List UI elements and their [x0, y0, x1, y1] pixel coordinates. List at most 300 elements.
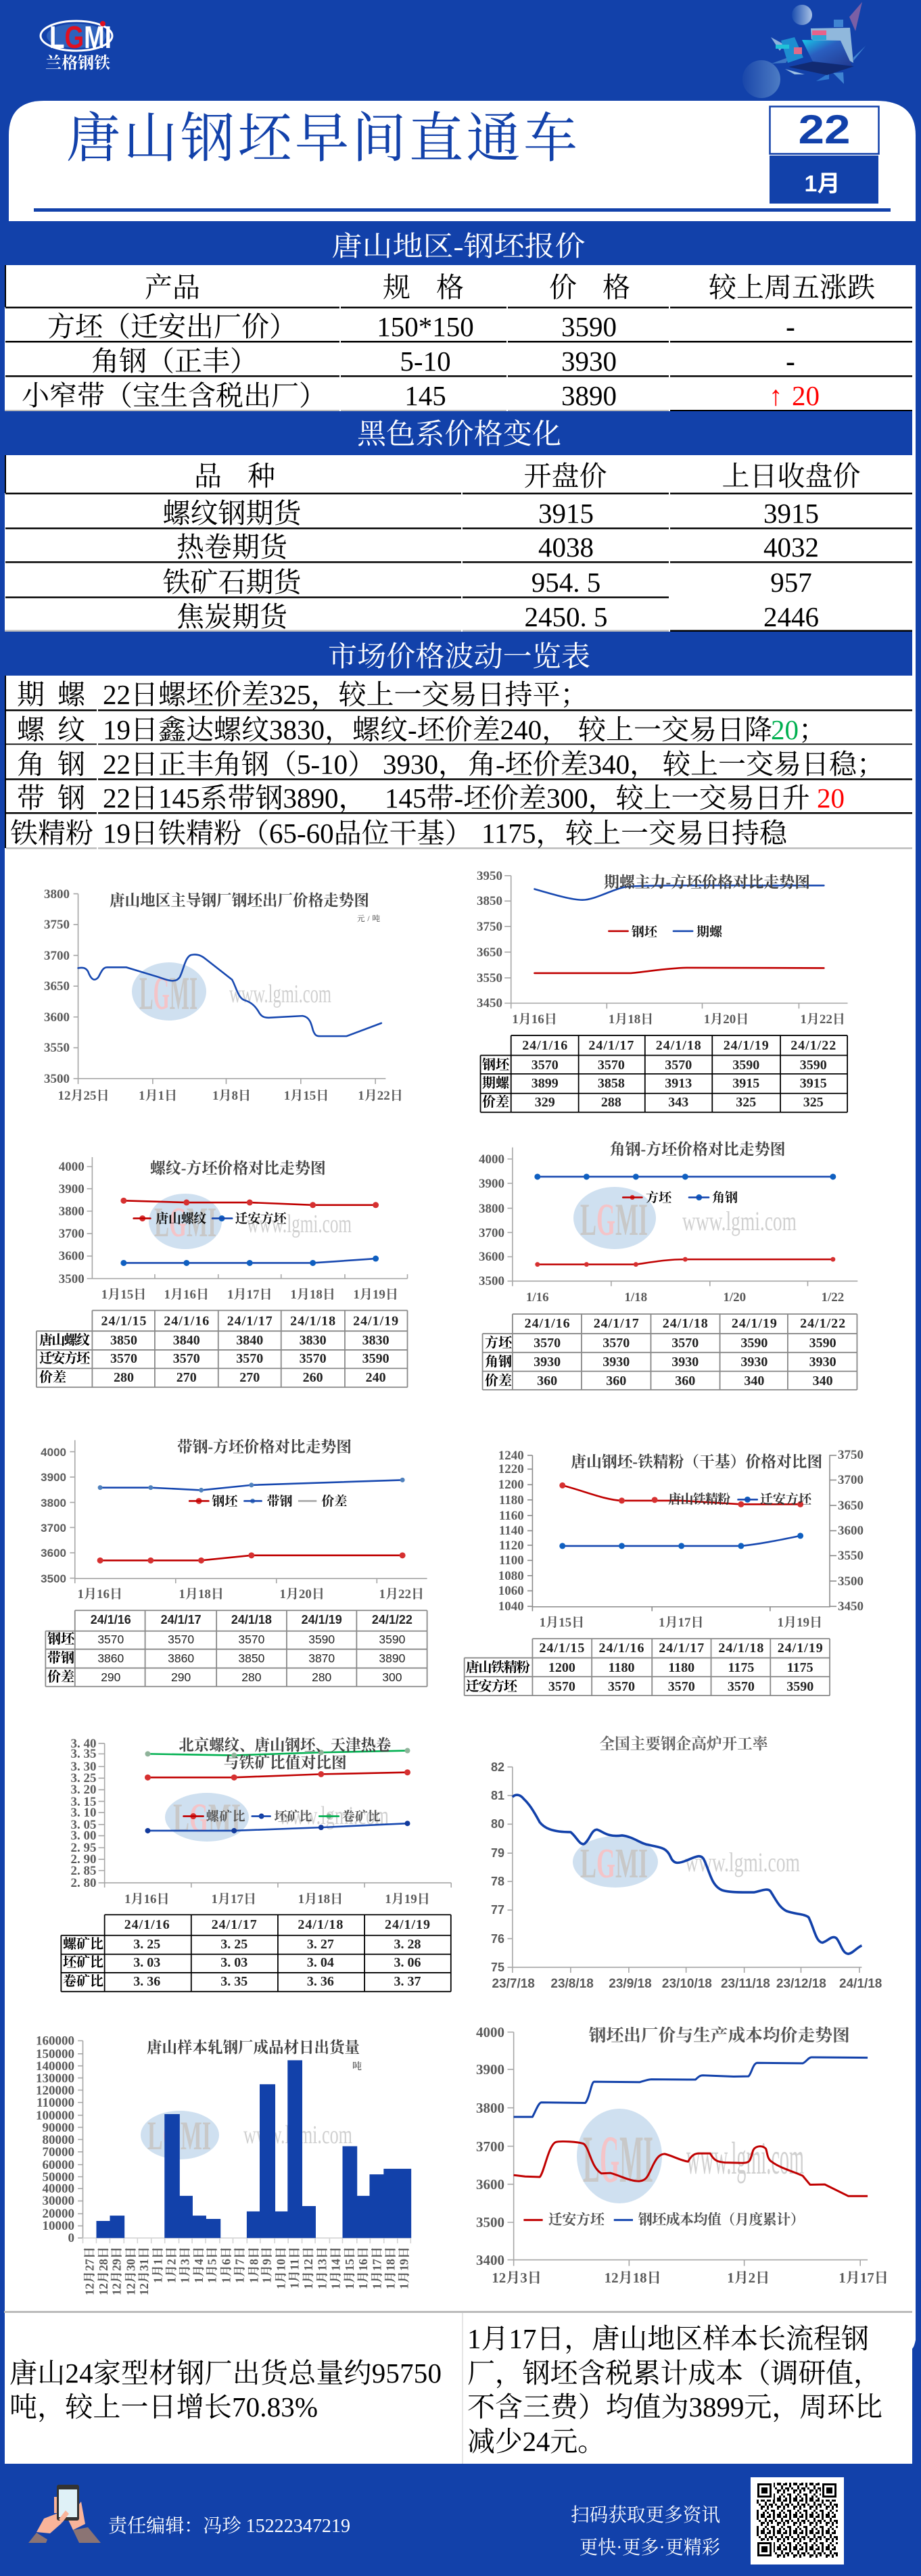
icon: LGMI logo: LGMI — [49, 20, 112, 55]
legend: 迁安方坯 — [760, 1492, 813, 1507]
left y axis labels: 1200 — [498, 1478, 524, 1492]
row: rebar — [17, 714, 826, 745]
panel: market fluctuation heading: 市场价格波动一览表 — [328, 641, 590, 673]
chart: Tangshan mill billet price trend — [44, 887, 403, 1103]
data table: 3840 — [236, 1333, 263, 1348]
row: coke futures: 2450. 5 — [525, 601, 607, 632]
panel: ferrous prices heading — [0, 411, 912, 455]
x axis labels: 1月20日 — [279, 1587, 325, 1601]
row: square billet: - — [786, 311, 795, 342]
data table: 3. 37 — [394, 1974, 421, 1989]
data table: 3570 — [671, 1336, 699, 1351]
row: iron concentrate — [10, 818, 788, 849]
y axis labels: 3700 — [476, 2138, 504, 2155]
data table: 3930 — [603, 1355, 630, 1369]
data table: 3590 — [362, 1351, 389, 1366]
x axis labels: 1/16 — [526, 1290, 549, 1305]
x axis labels: 1月5日 — [206, 2247, 219, 2283]
row: strip steel: 20 — [817, 782, 845, 814]
y axis labels: 3650 — [44, 979, 70, 993]
y axis labels: 3650 — [477, 945, 502, 960]
x axis labels: 24/1/18 — [839, 1977, 882, 1991]
x axis labels: 1月20日 — [704, 1012, 749, 1027]
x axis labels: 1月18日 — [384, 2247, 398, 2289]
chart title: 唐山地区主导钢厂钢坯出厂价格走势图 — [110, 891, 369, 909]
panel: market fluctuation heading — [0, 632, 912, 676]
row: hot coil futures: 热卷期货 — [176, 532, 289, 563]
x axis labels: 1/18 — [624, 1290, 647, 1305]
y axis labels: 40000 — [42, 2182, 74, 2196]
y axis labels: 2. 85 — [70, 1864, 96, 1878]
chart: iron ore ratios — [61, 1736, 451, 1992]
y axis labels: 3600 — [59, 1249, 85, 1263]
row: angle steel — [91, 346, 795, 377]
x axis labels: 1月16日 — [512, 1012, 557, 1027]
watermark — [577, 2109, 804, 2203]
row: rebar futures: 3915 — [763, 498, 819, 529]
footer — [0, 2464, 921, 2576]
data table: 3930 — [534, 1355, 561, 1369]
data table: 3915 — [732, 1076, 759, 1091]
row: rebar futures: 3915 — [538, 498, 594, 529]
row: iron ore futures: 954. 5 — [532, 567, 600, 598]
x axis labels: 23/8/18 — [550, 1977, 594, 1991]
watermark: LGMI — [173, 1796, 241, 1840]
x axis labels: 1月8日 — [247, 2247, 260, 2283]
row: strip steel: 带钢 — [17, 782, 85, 814]
panel: shipment note and cost note — [4, 2311, 912, 2464]
data table: 24/1/18 — [656, 1038, 701, 1053]
right y axis labels: 3700 — [838, 1473, 864, 1487]
y axis labels: 30000 — [42, 2194, 74, 2208]
text block: cost note: 不含三费）均值为3899元，周环比 — [467, 2391, 882, 2422]
data table: 3570 — [236, 1351, 263, 1366]
y axis labels: 20000 — [42, 2207, 74, 2221]
data table: 方坯 — [485, 1335, 513, 1351]
chart: daily shipments bar chart — [36, 2034, 411, 2295]
y axis labels: 10000 — [42, 2219, 74, 2233]
data table: 3899 — [532, 1076, 559, 1091]
text block: shipment note: 吨，较上一日增长70.83% — [9, 2391, 318, 2422]
table header: 上日收盘价 — [722, 461, 860, 492]
text block: scan prompt — [571, 2504, 720, 2558]
x axis labels: 23/12/18 — [776, 1977, 826, 1991]
watermark: LGMI — [580, 1194, 648, 1245]
legend: 唐山铁精粉 — [668, 1491, 730, 1507]
chart: blast furnace operating rate — [491, 1735, 882, 1991]
date box: month: 1月 — [805, 171, 840, 197]
data table: 329 — [535, 1095, 555, 1110]
x axis labels: 1月16日 — [356, 2247, 370, 2289]
data table: 24/1/22 — [372, 1613, 412, 1626]
data table: 24/1/19 — [724, 1038, 769, 1053]
row: angle steel: 22日正丰角钢（5-10） — [103, 749, 375, 780]
x axis labels: 1月1日 — [151, 2247, 164, 2283]
data table: 3590 — [740, 1336, 768, 1351]
data table: 3913 — [665, 1076, 692, 1091]
x axis labels — [124, 1892, 430, 1906]
data table: 325 — [803, 1095, 824, 1110]
data table: 24/1/16 — [164, 1313, 209, 1328]
data table: 3. 25 — [133, 1937, 160, 1952]
watermark — [149, 1194, 352, 1249]
row: angle steel: 3930 — [561, 346, 617, 377]
data table: 360 — [537, 1374, 557, 1388]
chart: angle steel vs billet — [479, 1141, 857, 1390]
data table: 角钢 — [485, 1354, 512, 1369]
y axis labels — [41, 1446, 66, 1585]
data table: 24/1/17 — [588, 1038, 634, 1053]
x axis labels: 1月15日 — [540, 1615, 584, 1630]
row: angle steel: 5-10 — [400, 346, 451, 377]
data table: 3870 — [308, 1652, 335, 1665]
y axis labels: 4000 — [479, 1152, 504, 1167]
chart title: 带钢-方坯价格对比走势图 — [176, 1438, 352, 1455]
y axis labels: 3900 — [59, 1182, 85, 1196]
y axis labels: 82 — [491, 1760, 504, 1774]
data table: 24/1/19 — [302, 1613, 342, 1626]
title panel — [9, 101, 916, 221]
legend: 方坯 — [646, 1190, 673, 1205]
x axis labels: 1月16日 — [124, 1892, 169, 1906]
row: futures rebar: 期螺 — [17, 679, 86, 710]
y axis labels: 100000 — [36, 2109, 74, 2123]
icon: LGMI logo: 兰格钢铁 — [45, 54, 110, 72]
data table: 300 — [382, 1670, 402, 1684]
data table: 1180 — [609, 1660, 634, 1675]
legend — [646, 1190, 738, 1205]
row: iron concentrate: 铁精粉 — [10, 818, 93, 849]
row: rebar futures: 螺纹钢期货 — [162, 498, 303, 529]
row: hot coil futures: 4038 — [538, 532, 594, 563]
y axis labels: 130000 — [36, 2071, 74, 2086]
x axis labels: 1月8日 — [212, 1088, 251, 1103]
data table: 340 — [744, 1374, 764, 1388]
data table: 3850 — [238, 1652, 265, 1665]
y axis labels: 80000 — [42, 2133, 74, 2147]
unit: 元/吨 — [357, 914, 380, 923]
left y axis labels: 1140 — [499, 1524, 524, 1538]
x axis labels: 12月27日 — [82, 2247, 96, 2295]
right y axis labels: 3600 — [838, 1524, 864, 1538]
y axis labels: 3450 — [477, 996, 502, 1010]
x axis labels: 23/11/18 — [721, 1977, 770, 1991]
watermark: LGMI — [154, 1200, 216, 1246]
watermark: LGMI — [147, 2113, 211, 2158]
legend: 唐山螺纹 — [156, 1211, 206, 1226]
x axis labels: 12月3日 — [492, 2270, 542, 2286]
y axis labels: 4000 — [59, 1160, 85, 1174]
legend — [548, 2211, 805, 2228]
y axis labels: 3. 25 — [70, 1771, 96, 1785]
data table: 24/1/17 — [212, 1917, 257, 1932]
table header: 较上周五涨跌 — [709, 272, 875, 303]
data table — [39, 1313, 398, 1385]
x axis labels — [492, 2270, 889, 2286]
x axis labels: 1月17日 — [227, 1287, 272, 1302]
data table: 1180 — [668, 1660, 694, 1675]
y axis labels: 3800 — [479, 1202, 504, 1216]
x axis labels: 1月17日 — [839, 2270, 889, 2286]
y axis labels: 3400 — [476, 2252, 504, 2268]
row: iron concentrate: 1175， — [481, 818, 563, 849]
row: narrow strip: ↑ — [769, 380, 783, 411]
chart: futures rebar vs billet — [477, 869, 848, 1113]
row: futures rebar: 22日螺坯价差325，较上一交易日持平； — [103, 679, 588, 710]
x axis labels: 1/22 — [822, 1290, 844, 1305]
watermark — [573, 1187, 797, 1249]
data table: 唐山铁精粉 — [466, 1659, 530, 1675]
watermark: www.lgmi.com — [243, 2121, 352, 2149]
data table: 迁安方坯 — [466, 1679, 519, 1694]
y axis labels — [70, 1737, 96, 1890]
data table: 270 — [239, 1370, 260, 1385]
chart title: 北京螺纹、唐山钢坯、天津热卷 — [179, 1736, 391, 1754]
chart title: 螺纹-方坯价格对比走势图 — [150, 1160, 326, 1177]
row: narrow strip — [22, 380, 820, 411]
x axis labels: 12月18日 — [605, 2270, 661, 2286]
chart: billet vs iron concentrate — [465, 1448, 864, 1695]
y axis labels: 4000 — [476, 2024, 504, 2040]
y axis labels: 120000 — [36, 2084, 74, 2098]
table header: 规格 — [383, 272, 464, 303]
row: strip steel: 145带-坯价差300，较上一交易日升 — [385, 782, 810, 814]
x axis labels: 1月1日 — [139, 1088, 177, 1103]
x axis labels: 1月18日 — [609, 1012, 653, 1027]
table header: 开盘价 — [523, 461, 607, 492]
row: iron ore futures: 铁矿石期货 — [162, 567, 303, 598]
row: angle steel: - — [786, 346, 795, 377]
row: iron ore futures: 957 — [770, 567, 812, 598]
data table: 24/1/18 — [663, 1316, 708, 1331]
data table: 价差 — [39, 1369, 66, 1385]
x axis labels: 1月17日 — [370, 2247, 383, 2289]
y axis labels: 3500 — [59, 1272, 85, 1286]
row: rebar: ； — [799, 714, 826, 745]
row: coke futures: 焦炭期货 — [176, 601, 289, 632]
text block: cost note: 1月17日，唐山地区样本长流程钢 — [467, 2323, 869, 2354]
data table: 280 — [312, 1670, 332, 1684]
x axis labels: 1月4日 — [192, 2247, 206, 2283]
legend: 坯矿比 — [275, 1808, 312, 1824]
data table: 24/1/18 — [298, 1917, 343, 1932]
x axis labels: 23/7/18 — [492, 1977, 535, 1991]
data table: 3. 35 — [220, 1974, 247, 1989]
legend: 带钢 — [266, 1494, 293, 1509]
x axis labels: 1月17日 — [212, 1892, 256, 1906]
x axis labels: 12月30日 — [124, 2247, 137, 2295]
text block: shipment note — [9, 2358, 442, 2422]
data table: 3930 — [740, 1355, 768, 1369]
data table: 24/1/18 — [290, 1313, 335, 1328]
data table: 3930 — [671, 1355, 699, 1369]
data table: 3830 — [300, 1333, 327, 1348]
table header — [145, 272, 875, 303]
legend: 迁安方坯 — [235, 1211, 287, 1226]
left y axis labels: 1240 — [498, 1449, 524, 1463]
row: rebar futures — [162, 498, 819, 529]
data table: 3570 — [97, 1633, 124, 1646]
y axis labels: 81 — [491, 1789, 504, 1802]
data table: 24/1/16 — [522, 1038, 567, 1053]
data table: 24/1/22 — [800, 1316, 845, 1331]
y axis labels: 160000 — [36, 2034, 74, 2048]
data table: 3570 — [300, 1351, 327, 1366]
x axis labels — [540, 1615, 822, 1630]
y axis labels: 3. 05 — [70, 1818, 96, 1832]
data table: 唐山螺纹 — [39, 1332, 90, 1348]
date box: month — [770, 156, 878, 204]
x axis labels: 12月31日 — [137, 2247, 151, 2295]
data table: 24/1/16 — [91, 1613, 131, 1626]
x axis labels — [77, 1587, 424, 1601]
data table: 24/1/15 — [539, 1641, 584, 1656]
left y axis labels: 1160 — [499, 1509, 524, 1523]
data table: 3860 — [168, 1652, 194, 1665]
data table: 3570 — [665, 1058, 692, 1073]
row: narrow strip: 3890 — [561, 380, 617, 411]
y axis labels: 3550 — [477, 971, 502, 985]
table header — [194, 461, 860, 492]
data table: 迁安方坯 — [39, 1351, 91, 1366]
y axis labels: 3700 — [41, 1522, 66, 1535]
legend: 卷矿比 — [342, 1808, 381, 1824]
data table: 3590 — [308, 1633, 335, 1646]
data table: 343 — [668, 1095, 688, 1110]
x axis labels: 12月28日 — [97, 2247, 110, 2295]
y axis labels: 110000 — [37, 2096, 74, 2110]
y axis labels: 2. 90 — [70, 1852, 96, 1867]
x axis labels: 1月13日 — [315, 2247, 329, 2289]
x axis labels: 1月9日 — [260, 2247, 273, 2283]
row: rebar: 20 — [771, 714, 799, 745]
left y axis labels: 1120 — [499, 1539, 524, 1553]
data table: 价差 — [47, 1669, 74, 1685]
data table: 340 — [813, 1374, 833, 1388]
text block: shipment note: 唐山24家型材钢厂出货总量约95750 — [9, 2358, 442, 2389]
x axis labels: 1月19日 — [397, 2247, 410, 2289]
data table: 3570 — [728, 1679, 755, 1694]
y axis labels: 60000 — [42, 2158, 74, 2172]
y axis labels: 79 — [491, 1846, 504, 1860]
legend: 期螺 — [696, 924, 723, 939]
x axis labels: 1月19日 — [777, 1615, 822, 1630]
y axis labels: 3. 40 — [70, 1737, 96, 1751]
y axis labels: 78 — [491, 1875, 504, 1888]
legend: 钢坯成本均值（月度累计） — [638, 2211, 805, 2228]
y axis labels: 50000 — [42, 2170, 74, 2184]
data table — [466, 1641, 823, 1694]
y axis labels: 3500 — [476, 2214, 504, 2230]
y axis labels: 3700 — [479, 1226, 504, 1240]
watermark — [132, 962, 331, 1021]
x axis labels: 23/9/18 — [609, 1977, 652, 1991]
watermark — [573, 1836, 800, 1888]
chart title: 唐山钢坯-铁精粉（干基）价格对比图 — [571, 1453, 822, 1470]
data table: 3570 — [598, 1058, 625, 1073]
row: square billet: 方坯（迁安出厂价） — [47, 311, 297, 342]
chart: rebar vs billet — [37, 1157, 408, 1387]
x axis labels — [512, 1012, 845, 1027]
row: coke futures: 2446 — [763, 601, 819, 632]
row: angle steel: 角-坯价差340， — [468, 749, 657, 780]
text block: scan prompt: 更快·更多·更精彩 — [580, 2537, 720, 2558]
data table: 24/1/19 — [353, 1313, 398, 1328]
y axis labels: 3750 — [477, 920, 502, 934]
legend — [156, 1211, 287, 1226]
data table: 3850 — [110, 1333, 137, 1348]
x axis labels: 1月2日 — [727, 2270, 770, 2286]
row: angle steel: 3930， — [383, 749, 466, 780]
data table: 280 — [114, 1370, 134, 1385]
data table: 3. 03 — [220, 1955, 247, 1970]
data table: 290 — [171, 1670, 191, 1684]
data table: 24/1/17 — [161, 1613, 202, 1626]
data table: 价差 — [485, 1373, 512, 1388]
data table: 3570 — [238, 1633, 265, 1646]
legend — [668, 1491, 813, 1507]
data table: 24/1/16 — [525, 1316, 570, 1331]
watermark — [165, 1793, 389, 1842]
x axis labels: 1月19日 — [353, 1287, 398, 1302]
x axis labels: 1月22日 — [379, 1587, 424, 1601]
legend: 钢坯 — [212, 1494, 239, 1509]
row: coke futures — [176, 601, 819, 632]
row: angle steel: 角钢（正丰） — [91, 346, 258, 377]
left y axis labels: 1080 — [498, 1569, 524, 1583]
y axis labels: 3900 — [476, 2061, 504, 2078]
y axis labels: 3950 — [477, 869, 502, 883]
panel: billet quotes table — [5, 265, 912, 411]
y axis labels — [491, 1760, 504, 1974]
panel: billet quotes heading — [0, 222, 912, 265]
y axis labels: 3800 — [41, 1497, 66, 1509]
data table: 3. 04 — [307, 1955, 334, 1970]
legend: 螺矿比 — [206, 1808, 245, 1824]
y axis labels: 3800 — [59, 1204, 85, 1219]
watermark — [141, 2111, 352, 2159]
icon: QR code — [751, 2477, 844, 2565]
data table: 3840 — [173, 1333, 200, 1348]
data table: 3890 — [379, 1652, 406, 1665]
data table: 24/1/15 — [101, 1313, 146, 1328]
x axis labels: 1月22日 — [800, 1012, 845, 1027]
x axis labels: 1月10日 — [275, 2247, 288, 2289]
right y axis labels — [838, 1448, 864, 1614]
x axis labels: 1月7日 — [233, 2247, 246, 2283]
y axis labels: 3. 00 — [70, 1829, 96, 1843]
date box: day — [770, 107, 879, 154]
data table — [485, 1316, 845, 1388]
row: angle steel — [17, 749, 884, 780]
y axis labels: 3800 — [476, 2100, 504, 2116]
data table: 坯矿比 — [63, 1954, 103, 1970]
y axis labels: 3500 — [479, 1274, 504, 1288]
panel: market fluctuation list — [5, 676, 912, 849]
left y axis labels — [498, 1449, 524, 1614]
data table: 3930 — [809, 1355, 836, 1369]
header band — [41, 2, 866, 98]
chart title: 角钢-方坯价格对比走势图 — [610, 1141, 786, 1158]
data table: 带钢 — [47, 1650, 74, 1666]
y axis labels: 76 — [491, 1932, 504, 1946]
x axis labels: 12月29日 — [110, 2247, 123, 2295]
chart title: 钢坯出厂价与生产成本均价走势图 — [589, 2026, 850, 2045]
data table: 3. 28 — [394, 1937, 421, 1952]
data table: 3570 — [173, 1351, 200, 1366]
x axis labels: 1/20 — [723, 1290, 746, 1305]
data table: 3. 03 — [133, 1955, 160, 1970]
